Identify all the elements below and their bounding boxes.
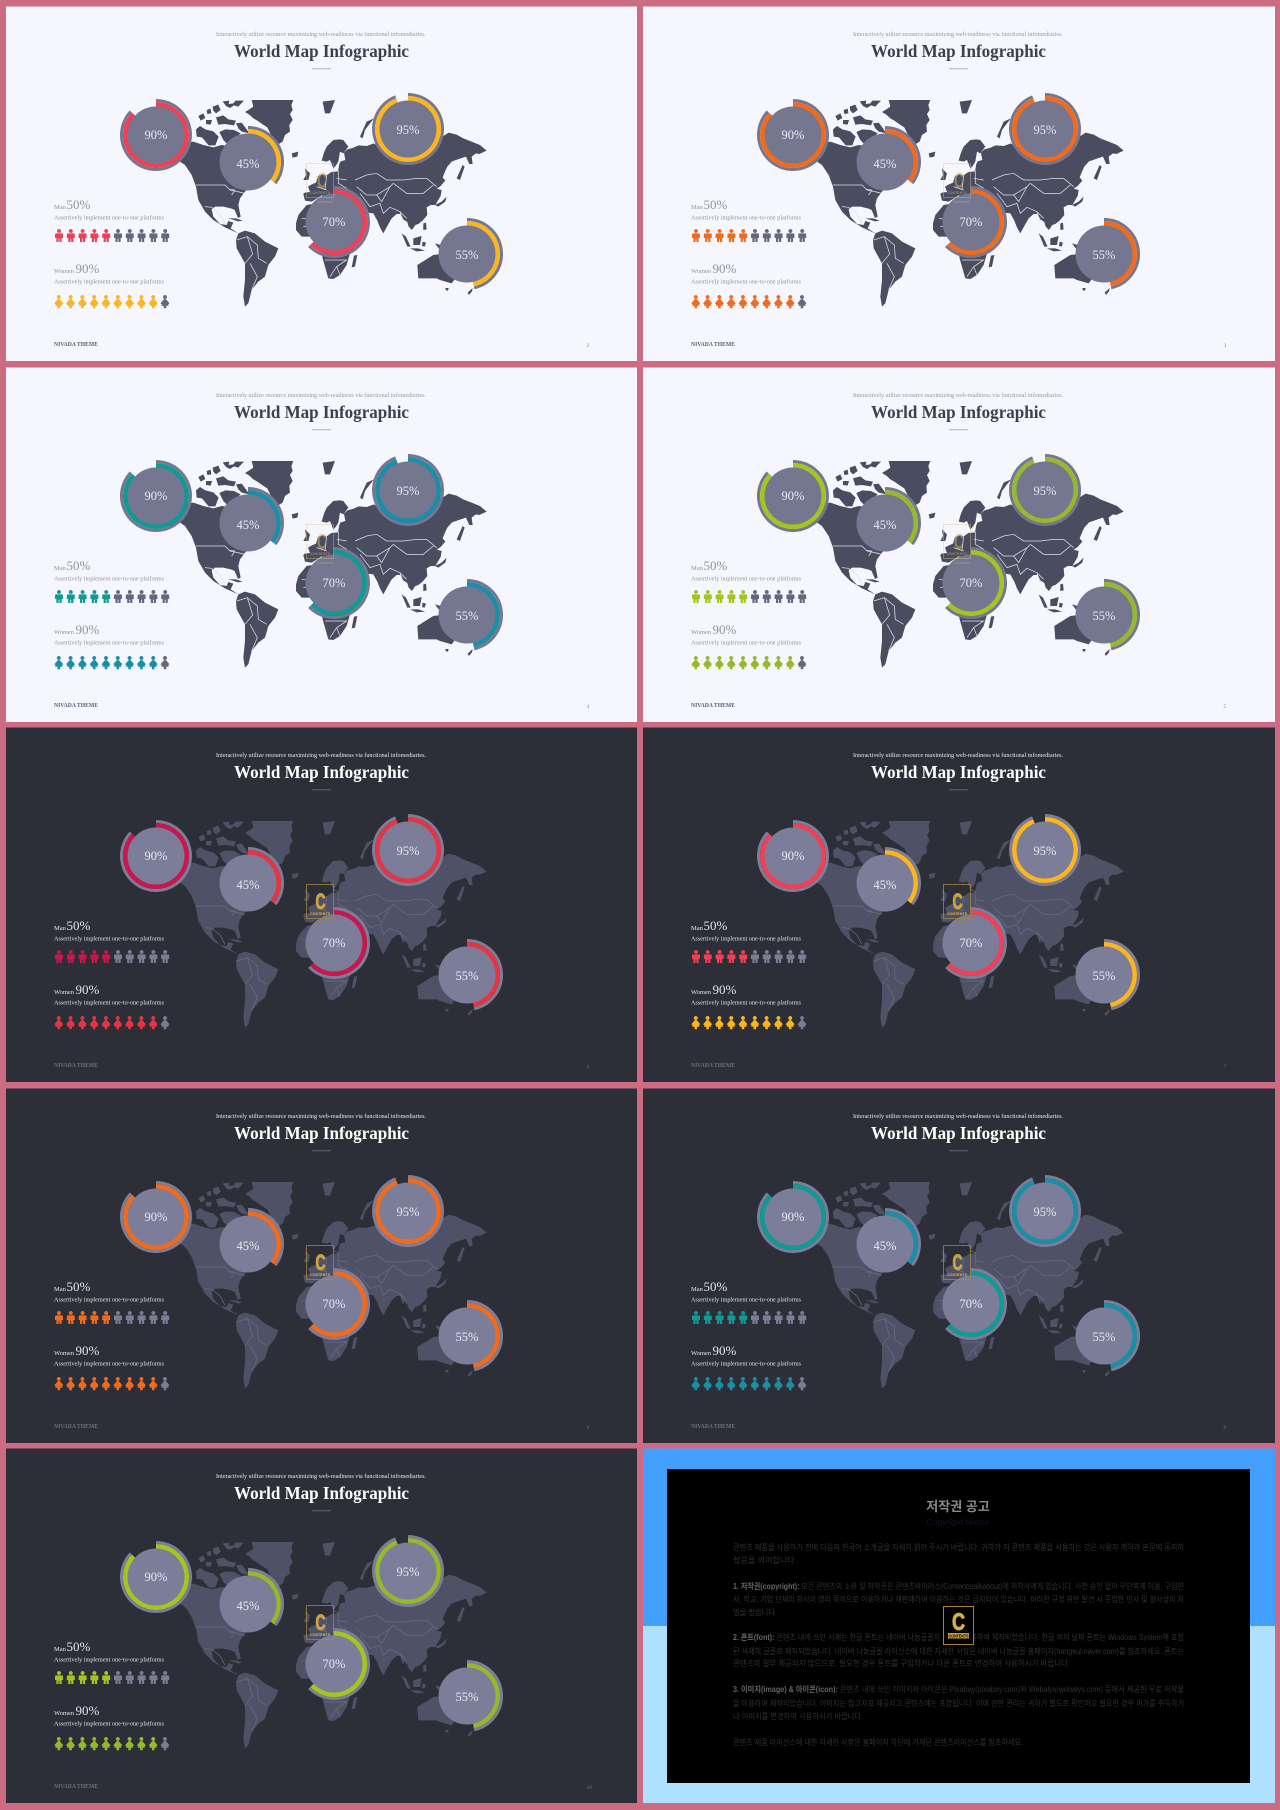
women statistic: Women	[54, 629, 74, 636]
panel background	[6, 6, 637, 361]
men description: Assertively implement one-to-one platforms	[691, 936, 801, 942]
title: World Map Infographic	[234, 762, 409, 782]
donut: 95%	[374, 456, 443, 524]
subtitle: Interactively utilize resource maximizing web-readiness via functional infomediaries.	[216, 1113, 426, 1120]
women description: Assertively implement one-to-one platforms	[54, 640, 164, 646]
notice section 2	[733, 1632, 1185, 1668]
world map	[807, 100, 1124, 307]
donut: 95%	[1011, 816, 1080, 884]
notice section 1	[733, 1581, 1185, 1617]
donut: 55%: 55%	[456, 248, 478, 262]
notice section 1: 벌을 받습니다.	[733, 1607, 777, 1617]
men statistic: Man	[691, 925, 703, 932]
donut: 55%	[1076, 220, 1139, 288]
copyright slide	[643, 1448, 1275, 1803]
panel background	[643, 368, 1275, 722]
watermark logo	[944, 164, 970, 202]
subtitle: Interactively utilize resource maximizing web-readiness via functional infomediaries.	[216, 1473, 426, 1480]
donut: 55%: 55%	[456, 1330, 478, 1344]
women pictogram row	[691, 656, 806, 669]
donut: 70%: 70%	[323, 576, 345, 590]
slide 5: light, green	[643, 368, 1275, 722]
world map	[170, 100, 487, 307]
donut: 55%: 55%	[1093, 248, 1115, 262]
donut: 45%: 45%	[874, 878, 896, 892]
donut: 70%: 70%	[960, 215, 982, 229]
donut: 55%: 55%	[1093, 1330, 1115, 1344]
donut: 55%	[438, 220, 502, 288]
footer brand: NIVADA THEME	[54, 1784, 98, 1790]
page number: 5	[1224, 704, 1226, 710]
title: World Map Infographic	[234, 41, 409, 61]
footer brand: NIVADA THEME	[54, 1063, 98, 1069]
page number: 6	[586, 1064, 590, 1070]
men statistic: 50%	[66, 1279, 90, 1294]
notice section 1: 1. 저작권(copyright): 모든 콘텐츠의 소유 및 저작권은 콘텐츠바이러스(Contentstalkabout)에 저작사에게 있습니다. 사전 승인 없이 무단복제 이용, 구입한	[733, 1581, 1185, 1591]
women description: Assertively implement one-to-one platforms	[691, 640, 801, 646]
donut: 55%	[438, 1662, 502, 1730]
notice intro: 콘텐츠 제품을 사용하기 전에 다음의 한국어 소개글을 자세히 읽어 주시기 바랍니다. 귀하가 이 콘텐츠 제품을 사용하는 것은 사용자 계약과 본문에 동의하	[733, 1542, 1185, 1552]
watermark logo: C	[952, 889, 963, 914]
men pictogram row	[55, 950, 169, 963]
women statistic: Women	[691, 1350, 711, 1357]
men description: Assertively implement one-to-one platforms	[54, 1296, 164, 1304]
footer brand: NIVADA THEME	[54, 703, 98, 709]
watermark logo	[944, 884, 970, 923]
subtitle: Interactively utilize resource maximizing web-readiness via functional infomediaries.	[853, 31, 1063, 38]
subtitle: Interactively utilize resource maximizing web-readiness via functional infomediaries.	[853, 392, 1063, 399]
title: World Map Infographic	[234, 1483, 409, 1503]
title: World Map Infographic	[871, 41, 1046, 61]
donut: 95%: 95%	[397, 123, 419, 137]
donut: 55%	[1076, 580, 1139, 649]
donut: 55%	[438, 1302, 502, 1370]
donut: 90%: 90%	[145, 849, 167, 863]
title divider	[312, 68, 331, 70]
donut: 90%	[122, 1542, 191, 1612]
women description: Assertively implement one-to-one platforms	[691, 1360, 801, 1368]
donut: 90%: 90%	[145, 1210, 167, 1224]
donut: 70%: 70%	[960, 936, 982, 950]
donut: 55%: 55%	[456, 1690, 478, 1704]
subtitle: Interactively utilize resource maximizing web-readiness via functional infomediaries.	[853, 752, 1063, 759]
donut: 95%: 95%	[1034, 484, 1056, 498]
donut: 90%	[122, 462, 191, 530]
women description: Assertively implement one-to-one platforms	[54, 1720, 164, 1728]
light blue background lower	[643, 1626, 1275, 1803]
slide 6: dark, crimson	[6, 728, 637, 1082]
men description: Assertively implement one-to-one platforms	[54, 576, 164, 582]
women pictogram row	[54, 1377, 169, 1390]
watermark logo: CONTENTS	[310, 551, 330, 556]
watermark logo	[306, 524, 334, 563]
donut: 95%	[374, 1176, 443, 1246]
center gold logo: CONTENTS	[948, 1634, 969, 1638]
slide 9: dark, teal	[643, 1088, 1275, 1443]
world map	[170, 1542, 487, 1749]
donut: 45%	[220, 848, 283, 912]
notice title: 저작권 공고	[926, 1499, 990, 1514]
donut: 55%	[1076, 1302, 1139, 1370]
title: World Map Infographic	[871, 762, 1046, 782]
panel background	[6, 1448, 637, 1803]
donut: 45%: 45%	[874, 518, 896, 532]
notice section 3: 3. 이미지(image) & 아이콘(icon): 콘텐츠 내에 쓰인 이미지와 아이콘은 Pixabay(pixabay.com)와 Webalys(webalys.com) 등에서 제공한 무료 저작물	[733, 1684, 1184, 1694]
footer brand: NIVADA THEME	[691, 703, 735, 709]
world map	[807, 1182, 1124, 1389]
women statistic: 90%	[76, 622, 100, 637]
donut: 90%	[122, 1182, 191, 1252]
women statistic: 90%	[712, 261, 736, 276]
women pictogram row	[691, 1016, 806, 1029]
men statistic: Man	[691, 204, 703, 211]
subtitle: Interactively utilize resource maximizing web-readiness via functional infomediaries.	[216, 31, 426, 38]
panel background	[6, 1088, 637, 1443]
watermark logo: CONTENTS	[310, 1272, 330, 1277]
donut: 45%: 45%	[237, 1239, 259, 1253]
subtitle: Interactively utilize resource maximizing web-readiness via functional infomediaries.	[216, 392, 426, 399]
donut: 90%: 90%	[782, 849, 804, 863]
women statistic: Women	[691, 989, 711, 996]
notice section 1: 사, 학교, 기업 단체의 회사의 영리 목적으로 이용하거나 재판매하여 이용하는 것은 금지되어 있습니다. 이러한 규정 위반 발견 시 준엄한 민사 및 형사상의 처	[733, 1594, 1184, 1604]
women statistic: 90%	[712, 1343, 736, 1358]
donut: 90%	[759, 1182, 828, 1252]
men statistic: 50%	[66, 197, 90, 212]
donut: 55%	[1076, 940, 1139, 1009]
women description: Assertively implement one-to-one platforms	[691, 1000, 801, 1006]
women pictogram row	[54, 656, 169, 669]
donut: 70%: 70%	[960, 576, 982, 590]
donut: 95%	[374, 816, 443, 884]
watermark logo: C	[952, 1250, 963, 1275]
men statistic: Man	[691, 1286, 703, 1293]
donut: 70%	[942, 1270, 1005, 1338]
women statistic: Women	[54, 1710, 74, 1717]
men statistic: Man	[54, 204, 66, 211]
footer brand: NIVADA THEME	[691, 342, 735, 348]
watermark logo: CONTENTS	[310, 190, 330, 195]
world map	[807, 821, 1124, 1028]
donut: 90%: 90%	[782, 128, 804, 142]
watermark logo	[306, 1606, 334, 1644]
men statistic: 50%	[66, 918, 90, 933]
panel background	[643, 728, 1275, 1082]
women pictogram row	[691, 1377, 806, 1390]
footer brand: NIVADA THEME	[691, 1063, 735, 1069]
women statistic: Women	[691, 629, 711, 636]
page number: 8	[586, 1425, 590, 1431]
watermark logo: CONTENTS	[947, 551, 967, 556]
women statistic: Women	[691, 268, 711, 275]
women statistic: 90%	[76, 1343, 100, 1358]
watermark logo: C	[316, 1610, 326, 1635]
donut: 70%: 70%	[323, 1657, 345, 1671]
panel background	[6, 728, 637, 1082]
men statistic: Man	[54, 1646, 66, 1653]
center gold logo	[944, 1606, 974, 1644]
donut: 55%	[438, 580, 502, 649]
donut: 45%: 45%	[237, 518, 259, 532]
donut: 95%	[374, 94, 443, 163]
notice section 3: 을 이용하여 제작되었습니다. 이미지는 참고자료 제공되고 콘텐츠에는 포함됩니다. 이에 관한 권리는 귀하가 별도로 확인하고 필요한 경우 허가를 취득하거	[733, 1698, 1184, 1708]
donut: 55%: 55%	[456, 969, 478, 983]
notice intro	[733, 1542, 1185, 1565]
donut: 45%	[220, 488, 283, 552]
donut: 90%	[122, 100, 191, 170]
title divider	[949, 1150, 968, 1152]
title divider	[312, 429, 331, 431]
women statistic: Women	[54, 1350, 74, 1357]
donut: 45%: 45%	[237, 878, 259, 892]
center gold logo: C	[952, 1609, 965, 1636]
men pictogram row	[692, 229, 806, 242]
donut: 95%	[1011, 94, 1080, 163]
women pictogram row	[54, 295, 169, 308]
footer brand: NIVADA THEME	[691, 1424, 735, 1430]
men statistic: 50%	[704, 1279, 728, 1294]
men pictogram row	[692, 950, 806, 963]
slide 3: light, orange	[643, 6, 1275, 361]
men statistic: 50%	[66, 558, 90, 573]
donut: 95%: 95%	[1034, 123, 1056, 137]
page number: 3	[1224, 343, 1226, 349]
donut: 90%	[759, 462, 828, 530]
watermark logo: CONTENTS	[947, 190, 967, 195]
donut: 95%: 95%	[397, 1565, 419, 1579]
page number: 10	[586, 1785, 592, 1791]
title divider	[949, 789, 968, 791]
watermark logo: CONTENTS	[310, 911, 330, 916]
men statistic: Man	[54, 925, 66, 932]
donut: 95%: 95%	[397, 844, 419, 858]
donut: 70%	[306, 908, 368, 978]
watermark logo: C	[317, 168, 327, 193]
men statistic: Man	[54, 565, 66, 572]
men statistic: 50%	[704, 918, 728, 933]
donut: 45%	[856, 1210, 920, 1272]
donut: 45%: 45%	[874, 157, 896, 171]
donut: 55%: 55%	[456, 609, 478, 623]
donut: 55%: 55%	[1093, 969, 1115, 983]
title: World Map Infographic	[234, 1123, 409, 1143]
men description: Assertively implement one-to-one platforms	[691, 576, 801, 582]
donut: 45%: 45%	[874, 1239, 896, 1253]
donut: 70%: 70%	[960, 1297, 982, 1311]
donut: 70%	[942, 548, 1005, 618]
title divider	[949, 68, 968, 70]
donut: 55%	[438, 940, 502, 1009]
men statistic: 50%	[66, 1639, 90, 1654]
page number: 2	[586, 343, 590, 349]
donut: 90%	[759, 100, 828, 170]
donut: 95%	[374, 1536, 443, 1606]
donut: 70%	[306, 1270, 368, 1338]
panel background	[6, 368, 637, 722]
donut: 70%	[942, 188, 1005, 256]
title divider	[312, 789, 331, 791]
donut: 90%: 90%	[145, 1570, 167, 1584]
watermark logo: CONTENTS	[947, 1272, 967, 1277]
women pictogram row	[54, 1016, 169, 1029]
watermark logo	[306, 1246, 334, 1284]
donut: 70%	[306, 548, 368, 618]
notice section 2: 2. 폰트(font): 콘텐츠 내에 쓰인 서체는 한글 폰트는 네이버 나눔글꼴의 서체를 사용하여 제작되었습니다. 한글 외의 날짜 폰트는 Windows System에 포함	[733, 1632, 1185, 1642]
world map	[807, 461, 1124, 668]
slide 2: light, red and yellow	[6, 6, 637, 361]
page number: 7	[1224, 1064, 1226, 1070]
donut: 70%: 70%	[323, 215, 345, 229]
women description: Assertively implement one-to-one platforms	[54, 1000, 164, 1006]
blue background upper	[643, 1448, 1275, 1626]
donut: 95%	[1011, 456, 1080, 524]
world map	[170, 1182, 487, 1389]
donut: 95%: 95%	[397, 1205, 419, 1219]
watermark logo: C	[954, 168, 964, 193]
title: World Map Infographic	[871, 402, 1046, 422]
world map	[170, 821, 487, 1028]
donut: 45%	[856, 128, 920, 190]
men statistic: 50%	[704, 558, 728, 573]
watermark logo: C	[316, 889, 326, 914]
watermark logo: CONTENTS	[947, 911, 967, 916]
title: World Map Infographic	[871, 1123, 1046, 1143]
men description: Assertively implement one-to-one platforms	[54, 1656, 164, 1664]
donut: 45%	[220, 1570, 283, 1632]
donut: 70%	[942, 908, 1005, 978]
panel background	[643, 6, 1275, 361]
men statistic: Man	[54, 1286, 66, 1293]
watermark logo: C	[317, 529, 327, 554]
panel background	[643, 1088, 1275, 1443]
donut: 95%: 95%	[397, 484, 419, 498]
slide 7: dark, red and yellow	[643, 728, 1275, 1082]
donut: 90%	[122, 822, 191, 890]
men description: Assertively implement one-to-one platforms	[691, 1296, 801, 1304]
slide 4: light, teal	[6, 368, 637, 722]
watermark logo	[306, 884, 334, 923]
men pictogram row	[692, 590, 806, 603]
subtitle: Interactively utilize resource maximizing web-readiness via functional infomediaries.	[853, 1113, 1063, 1120]
women pictogram row	[54, 1737, 169, 1750]
watermark logo	[944, 524, 970, 563]
women pictogram row	[691, 295, 806, 308]
men pictogram row	[55, 1311, 169, 1324]
watermark logo: C	[316, 1250, 326, 1275]
donut: 90%	[759, 822, 828, 890]
men description: Assertively implement one-to-one platforms	[54, 936, 164, 942]
women statistic: 90%	[76, 1703, 100, 1718]
donut: 90%: 90%	[782, 489, 804, 503]
men pictogram row	[55, 1671, 169, 1684]
donut: 70%	[306, 1630, 368, 1698]
men description: Assertively implement one-to-one platforms	[54, 214, 164, 222]
men pictogram row	[692, 1311, 806, 1324]
donut: 45%: 45%	[237, 157, 259, 171]
men pictogram row	[55, 229, 169, 242]
women description: Assertively implement one-to-one platforms	[691, 278, 801, 286]
watermark logo	[306, 164, 334, 202]
watermark logo: CONTENTS	[310, 1632, 330, 1637]
title divider	[312, 1150, 331, 1152]
men statistic: Man	[691, 565, 703, 572]
women description: Assertively implement one-to-one platforms	[54, 278, 164, 286]
subtitle: Interactively utilize resource maximizing web-readiness via functional infomediaries.	[216, 752, 426, 759]
title divider	[312, 1510, 331, 1512]
donut: 95%: 95%	[1034, 844, 1056, 858]
notice section 2: 콘텐츠의 일부 제공되지 않으므로, 필요한 경우 폰트를 구입하거나 다른 폰트로 변경하여 사용하시기 바랍니다.	[733, 1658, 1070, 1668]
donut: 70%: 70%	[323, 936, 345, 950]
men statistic: 50%	[704, 197, 728, 212]
women statistic: 90%	[76, 261, 100, 276]
donut: 45%	[220, 128, 283, 190]
women description: Assertively implement one-to-one platforms	[54, 1360, 164, 1368]
women statistic: 90%	[76, 982, 100, 997]
slide 8: dark, orange	[6, 1088, 637, 1443]
notice section 3: 나 이미지를 변경하여 사용하시기 바랍니다.	[733, 1711, 863, 1721]
page number: 4	[586, 704, 590, 710]
page number: 9	[1224, 1425, 1226, 1431]
watermark logo	[944, 1246, 970, 1284]
title: World Map Infographic	[234, 402, 409, 422]
notice intro: 셨음을 의미합니다.	[733, 1555, 797, 1565]
footer brand: NIVADA THEME	[54, 1424, 98, 1430]
footer brand: NIVADA THEME	[54, 342, 98, 348]
women statistic: Women	[54, 989, 74, 996]
donut: 90%: 90%	[145, 489, 167, 503]
notice section 2: 된 서체의 글꼴로 제작되었습니다. 네이버 나눔글꼴 라이선스에 대한 자세한 사항은 네이버 나눔글꼴 홈페이지(hangeul.naver.com)를 참조하세요. 폰트는	[733, 1646, 1184, 1656]
donut: 95%: 95%	[1034, 1205, 1056, 1219]
donut: 70%: 70%	[323, 1297, 345, 1311]
women statistic: 90%	[712, 622, 736, 637]
donut: 90%: 90%	[145, 128, 167, 142]
donut: 55%: 55%	[1093, 609, 1115, 623]
black notice panel	[667, 1469, 1250, 1783]
world map	[170, 461, 487, 668]
notice closing: 콘텐츠 제품 라이선스에 대한 자세한 사항은 홈페이지 하단에 기재된 콘텐츠라이선스를 참조하세요.	[733, 1737, 1023, 1747]
donut: 45%	[856, 488, 920, 552]
notice subtitle: Copyright Notice	[927, 1517, 990, 1527]
donut: 45%: 45%	[237, 1599, 259, 1613]
donut: 95%	[1011, 1176, 1080, 1246]
women statistic: 90%	[712, 982, 736, 997]
watermark logo: C	[954, 529, 964, 554]
donut: 90%: 90%	[782, 1210, 804, 1224]
notice section 3	[733, 1684, 1184, 1721]
slide 10: dark, green	[6, 1448, 637, 1803]
donut: 45%	[220, 1210, 283, 1272]
women statistic: Women	[54, 268, 74, 275]
men pictogram row	[55, 590, 169, 603]
donut: 70%	[306, 188, 368, 256]
men description: Assertively implement one-to-one platforms	[691, 214, 801, 222]
donut: 45%	[856, 848, 920, 912]
title divider	[949, 429, 968, 431]
